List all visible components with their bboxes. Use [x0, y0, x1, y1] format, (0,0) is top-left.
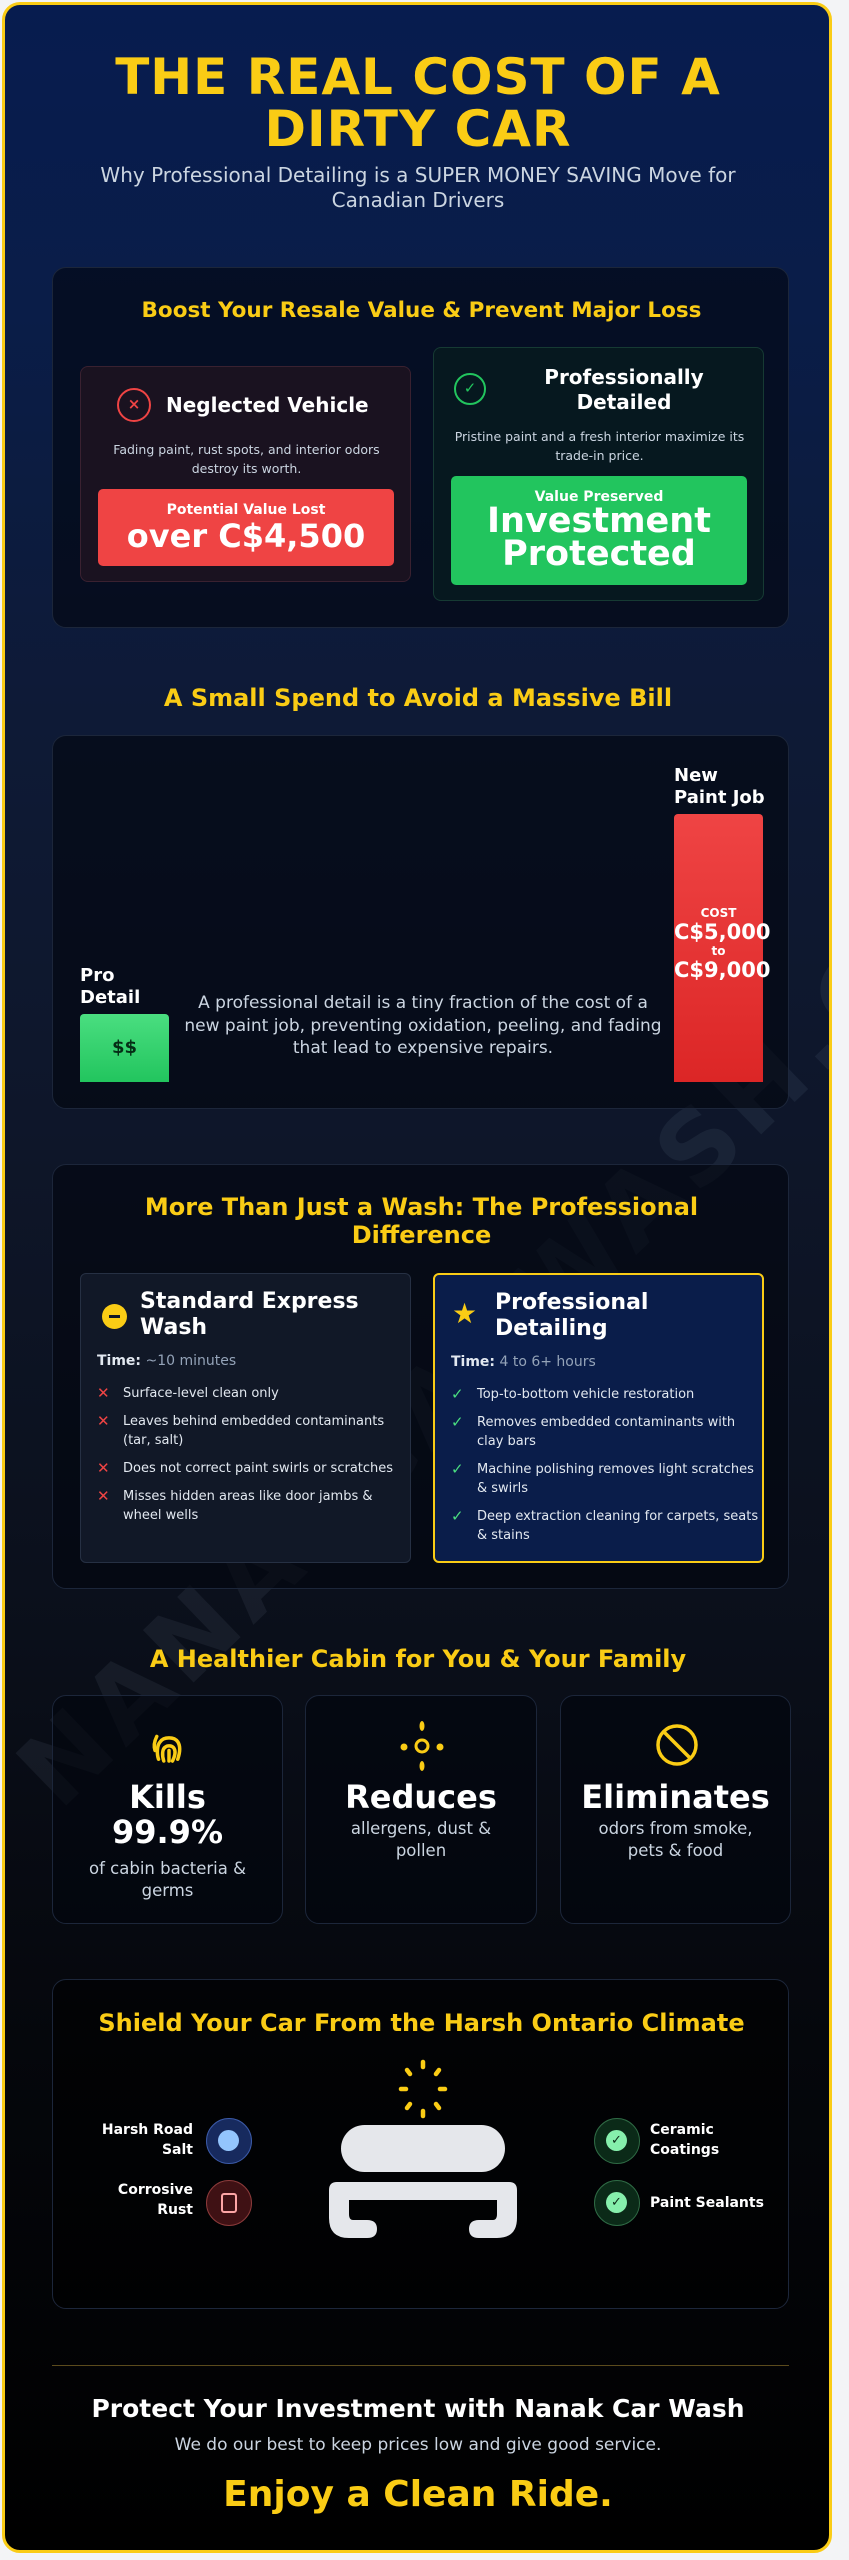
- icon: prohibited: [656, 1724, 698, 1766]
- subtitle: Why Professional Detailing is a SUPER MONEY SAVING Move for Canadian Drivers: [100, 163, 736, 212]
- heading: professional: Detailing: [495, 1316, 608, 1341]
- list: professional benefits: Top-to-bottom vehicle restoration: [477, 1387, 694, 1402]
- text: neglected desc: Fading paint, rust spots, and interior odors destroy its worth.: [113, 442, 380, 476]
- icon: x circle: ×: [128, 395, 140, 413]
- list: professional benefits: ✓: [451, 1413, 464, 1431]
- heading: professional: Professional: [495, 1290, 648, 1315]
- list: professional benefits: Deep extraction cleaning for carpets, seats & stains: [477, 1509, 758, 1543]
- text: kills stat: [112, 1778, 223, 1851]
- label: rust: Rust: [157, 2202, 193, 2218]
- label: sealants: Paint Sealants: [650, 2195, 764, 2211]
- bar: pro detail: $$: [112, 1037, 137, 1058]
- icon: check circle: [454, 373, 486, 405]
- text: professional time: Time: 4 to 6+ hours: [451, 1354, 596, 1370]
- list: standard drawbacks: Does not correct paint swirls or scratches: [123, 1461, 393, 1476]
- label: new paint job: New: [674, 765, 718, 786]
- footer text: We do our best to keep prices low and give good service.: [175, 2435, 661, 2455]
- label: rust: [118, 2182, 193, 2218]
- list: standard drawbacks: ✕: [97, 1459, 110, 1477]
- heading: detailed: [544, 365, 704, 414]
- card: professional detailing: [433, 1273, 764, 1563]
- text: eliminates: Eliminates: [581, 1778, 770, 1816]
- text: eliminates desc: odors from smoke, pets & food: [598, 1819, 753, 1860]
- bar: new paint job: [674, 814, 763, 1082]
- heading: small spend: A Small Spend to Avoid a Massive Bill: [164, 684, 672, 712]
- icon: check circle: ✓: [464, 379, 476, 397]
- heading: standard: [140, 1289, 359, 1340]
- title: [115, 48, 721, 158]
- callout: investment protected: Value Preserved: [535, 489, 663, 505]
- list: standard drawbacks: Surface-level clean only: [123, 1386, 279, 1401]
- list: professional benefits: ✓: [451, 1385, 464, 1403]
- bar: new paint job: COST: [701, 906, 736, 920]
- heading: standard: Standard Express: [140, 1289, 359, 1314]
- heading: standard: Wash: [140, 1315, 207, 1340]
- icon: star: ★: [452, 1297, 477, 1330]
- footer tagline: Enjoy a Clean Ride.: [223, 2474, 613, 2515]
- list: standard drawbacks: ✕: [97, 1487, 110, 1505]
- panel: climate protection: [52, 1979, 789, 2309]
- label: pro detail: [80, 965, 140, 1008]
- callout: investment protected: Protected: [502, 534, 696, 574]
- list: professional benefits: [451, 1385, 758, 1543]
- text: kills stat: 99.9%: [112, 1813, 223, 1851]
- icon: rust: [206, 2180, 252, 2226]
- footer heading: Protect Your Investment with Nanak Car Wash: [91, 2394, 745, 2423]
- text: reduces: Reduces: [345, 1778, 497, 1816]
- callout: value lost: Potential Value Lost: [167, 502, 325, 518]
- label: rust: Corrosive: [118, 2182, 193, 2198]
- heading: professional: [495, 1290, 648, 1341]
- list: standard drawbacks: Misses hidden areas like door jambs & wheel wells: [123, 1489, 372, 1523]
- card: eliminates odors: [560, 1695, 791, 1924]
- list: standard drawbacks: ✕: [97, 1384, 110, 1402]
- card: professionally detailed: [433, 347, 764, 601]
- label: ceramic: Coatings: [650, 2142, 719, 2158]
- heading: neglected: Neglected Vehicle: [166, 393, 369, 417]
- icon: fingerprint: [152, 1734, 182, 1763]
- callout: value lost: [98, 489, 394, 566]
- text: detailed desc: Pristine paint and a fresh interior maximize its trade-in price.: [455, 429, 744, 463]
- icon: minus circle: [102, 1304, 127, 1329]
- text: standard time: Time: ~10 minutes: [97, 1353, 236, 1369]
- bar: new paint job: C$9,000: [674, 958, 770, 982]
- list: professional benefits: Removes embedded contaminants with clay bars: [477, 1415, 735, 1449]
- heading: resale: Boost Your Resale Value & Prevent Major Loss: [142, 298, 701, 323]
- card: reduces allergens: [305, 1695, 537, 1924]
- icon: ceramic check: ✓: [611, 2133, 622, 2148]
- bar: new paint job: to: [712, 944, 725, 958]
- title: THE REAL COST OF A: [115, 48, 721, 106]
- label: road salt: Salt: [162, 2142, 193, 2158]
- icon: salt: [206, 2118, 252, 2164]
- panel: professional difference: [52, 1164, 789, 1589]
- heading: detailed: Detailed: [577, 390, 671, 414]
- icon: sparkle: [400, 1721, 444, 1771]
- icon: sealant check: ✓: [611, 2195, 622, 2210]
- label: ceramic: Ceramic: [650, 2122, 714, 2138]
- label: new paint job: [674, 765, 765, 808]
- card: neglected vehicle: [80, 366, 411, 582]
- list: standard drawbacks: Leaves behind embedded contaminants (tar, salt): [123, 1414, 384, 1448]
- list: professional benefits: ✓: [451, 1507, 464, 1525]
- list: standard drawbacks: ✕: [97, 1412, 110, 1430]
- heading: difference: More Than Just a Wash: The Professional Difference: [145, 1193, 698, 1249]
- card: standard express wash: [80, 1273, 411, 1563]
- callout: investment protected: Investment: [487, 501, 711, 541]
- label: new paint job: Paint Job: [674, 787, 765, 808]
- panel: resale value: [52, 267, 789, 628]
- heading: healthier cabin: A Healthier Cabin for You & Your Family: [150, 1645, 686, 1673]
- icon: ceramic check: [594, 2118, 640, 2164]
- label: ceramic: [650, 2122, 719, 2158]
- bar: new paint job: C$5,000: [674, 920, 770, 944]
- callout: value lost: over C$4,500: [127, 517, 365, 555]
- list: standard drawbacks: [97, 1384, 393, 1523]
- icon: car shape: [329, 2125, 517, 2238]
- list: professional benefits: ✓: [451, 1460, 464, 1478]
- heading: climate: Shield Your Car From the Harsh Ontario Climate: [98, 2009, 745, 2037]
- text: reduces desc: allergens, dust & pollen: [351, 1819, 491, 1860]
- text: chart caption: A professional detail is a tiny fraction of the cost of a new paint job, preventing oxidation, peeling, and fading that lead to expensive repairs.: [184, 993, 662, 1058]
- icon: sealant check: [594, 2180, 640, 2226]
- bar: pro detail: [80, 1014, 169, 1082]
- icon: sun sparkle: [398, 2060, 448, 2118]
- label: road salt: Harsh Road: [102, 2122, 193, 2138]
- heading: detailed: Professionally: [544, 365, 704, 389]
- text: kills stat: Kills: [129, 1778, 206, 1816]
- icon: x circle: [117, 388, 151, 422]
- callout: investment protected: [451, 476, 747, 585]
- label: pro detail: Detail: [80, 987, 140, 1008]
- label: road salt: [102, 2122, 193, 2158]
- text: kills desc: of cabin bacteria & germs: [89, 1859, 246, 1900]
- label: pro detail: Pro: [80, 965, 114, 986]
- title: DIRTY CAR: [264, 100, 571, 158]
- list: professional benefits: Machine polishing removes light scratches & swirls: [477, 1462, 754, 1496]
- panel: cost comparison chart: [52, 735, 789, 1109]
- card: kills bacteria: [52, 1695, 283, 1924]
